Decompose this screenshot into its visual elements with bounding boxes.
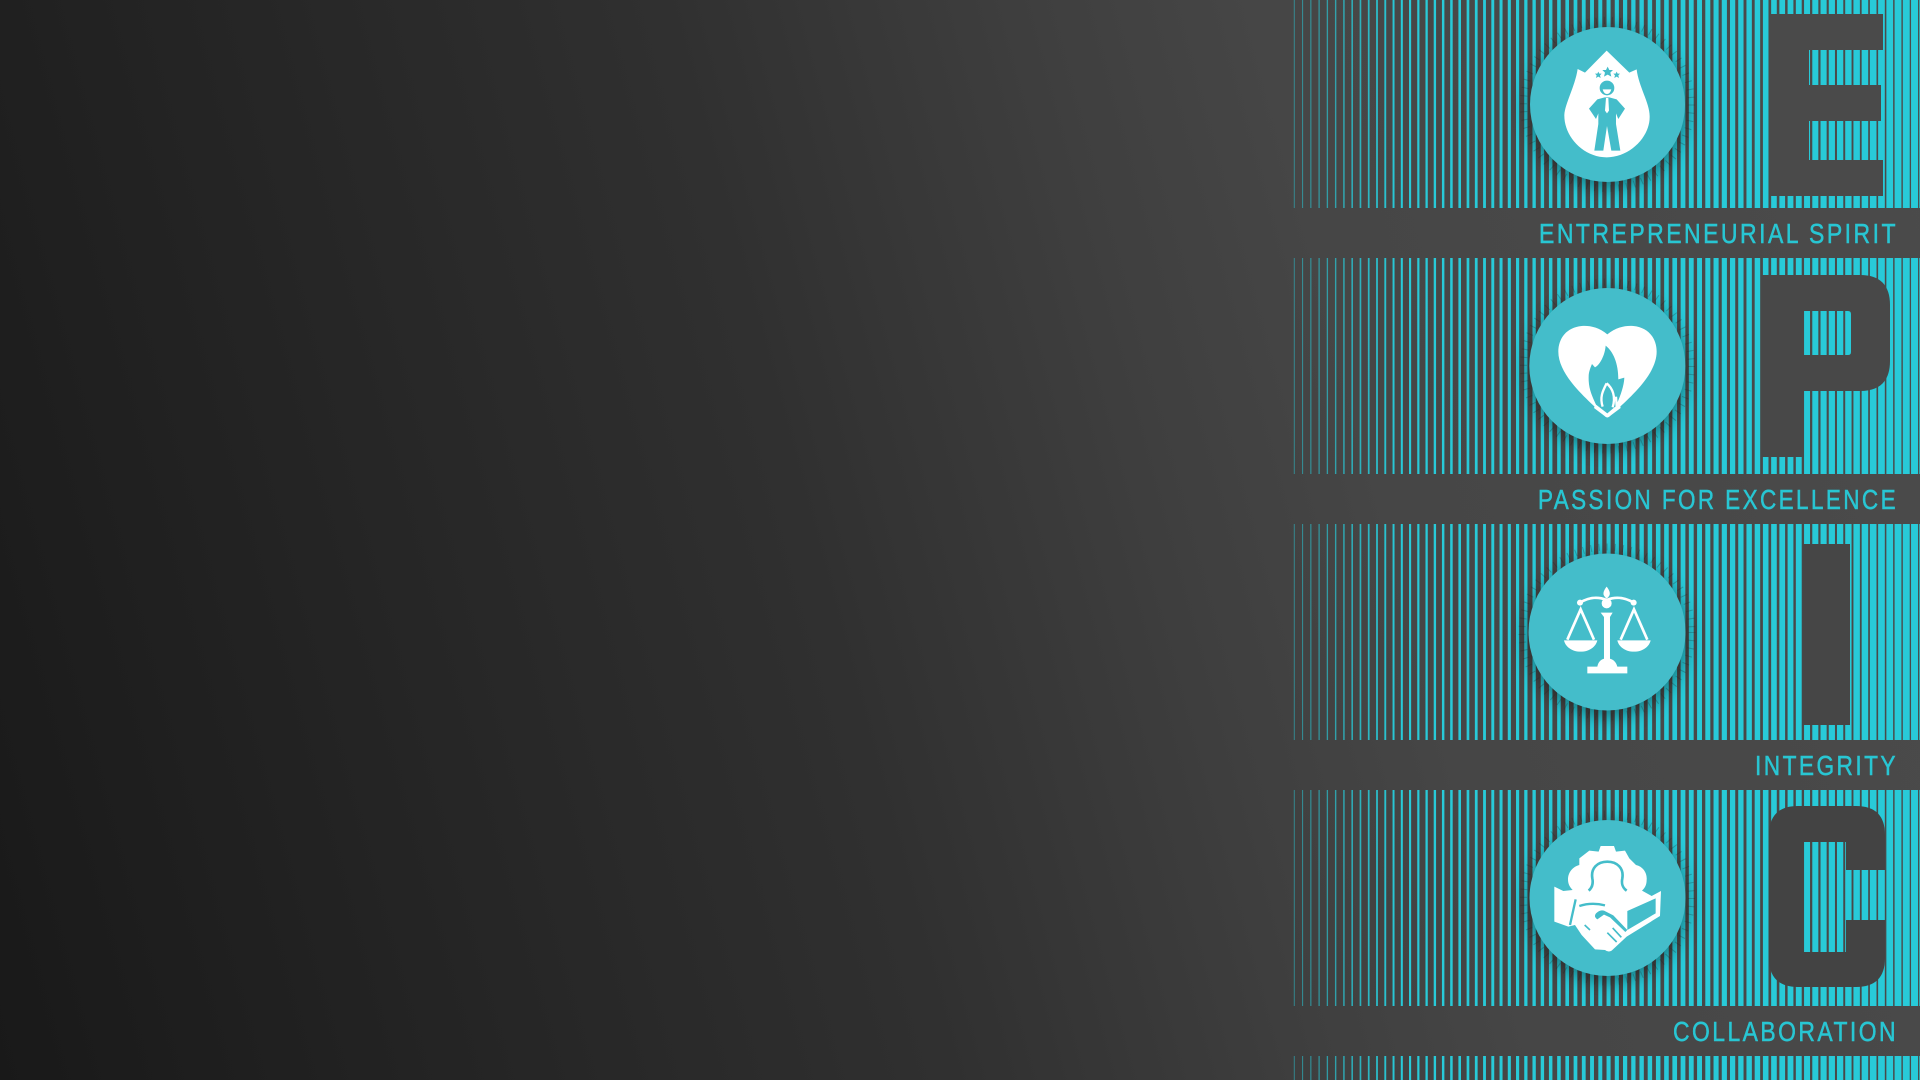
stripe band: I [1294, 524, 1920, 740]
icon badge: entrepreneurial spirit [1524, 20, 1692, 189]
icon badge: integrity [1522, 547, 1692, 718]
icon: flame shield with person [1564, 51, 1650, 157]
icon badge: passion for excellence [1524, 282, 1692, 451]
icon: balance scales [1564, 587, 1651, 673]
letter I [1802, 544, 1850, 725]
stripe band: P [1294, 258, 1920, 474]
letter E [1770, 14, 1883, 196]
stripe band: C [1294, 790, 1920, 1006]
letter P [1762, 275, 1890, 457]
icon badge: collaboration [1524, 814, 1692, 983]
icon: heart with flame [1558, 326, 1657, 417]
stripe band: partial bottom [1294, 1056, 1920, 1080]
letter C [1769, 806, 1885, 987]
icon: gear, person and handshake [1554, 846, 1661, 952]
stripe band: E [1294, 0, 1920, 208]
